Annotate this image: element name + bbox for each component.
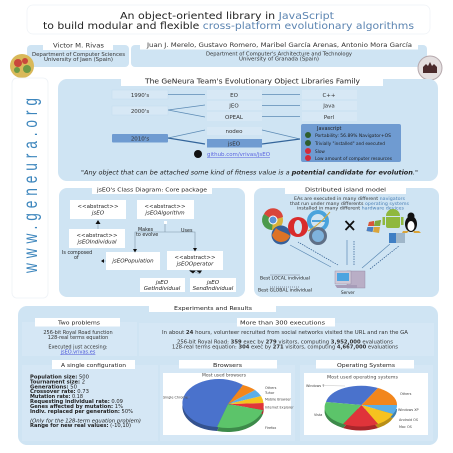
panel: Jaen affiliation: Department of Computer Sciences	[32, 52, 126, 58]
pie labels: operating systems	[306, 384, 419, 429]
heading: class diagram	[92, 184, 212, 194]
panel: Jaen affiliation	[27, 40, 129, 67]
pie chart: operating systems	[325, 386, 397, 430]
panel: Granada affiliation: Juan J. Merelo, Gustavo Romero, Maribel García Arenas, Antonio Mora García	[146, 42, 412, 49]
panel: island model	[254, 184, 439, 297]
libraries: EO	[230, 93, 239, 99]
description	[290, 196, 410, 212]
panel: two problems: 256-bit Royal Road function	[43, 330, 113, 336]
panel: single configuration: Tournament size: 2	[30, 380, 85, 386]
arrows: timeline	[168, 94, 300, 144]
panel: single configuration: Indiv. replaced per generation: 50%	[30, 409, 133, 415]
class boxes: jsEOOperator	[176, 262, 214, 268]
pie chart: browsers	[182, 379, 264, 432]
panel: www.geneura.org	[12, 78, 48, 298]
arrows: relations	[98, 223, 200, 274]
panel: single configuration: (Only for the 128-term equation problem)	[30, 418, 141, 424]
arrows: island exchange	[290, 240, 390, 268]
panel: single configuration: Crossover rate: 0.73	[30, 389, 89, 395]
heading: family: The GeNeura Team's Evolutionary Object Libraries Family	[144, 78, 360, 86]
icons: browsers	[262, 208, 330, 245]
libraries: JEO	[228, 104, 239, 110]
panel: Jaen affiliation: University of Jaen (Spain)	[44, 57, 113, 63]
panel: single configuration: A single configuration	[61, 363, 126, 369]
panel: Granada affiliation: University of Granada (Spain)	[239, 56, 319, 62]
legend: Best LOCAL individual	[260, 276, 310, 282]
diagram labels	[62, 227, 193, 261]
class boxes: SendIndividual	[193, 286, 234, 292]
icons: operating systems	[366, 209, 421, 243]
panel: single configuration: Mutation rate: 0.18	[30, 394, 83, 400]
libraries: C++	[322, 93, 336, 99]
legend	[258, 275, 312, 294]
pie labels: browsers: Tuhor	[264, 391, 275, 395]
diagram labels: of	[74, 255, 79, 261]
class boxes: jsEOAlgorithm	[144, 210, 185, 216]
pie labels: operating systems: Windows XP	[398, 408, 419, 412]
panel: www.geneura.org: www.geneura.org	[20, 93, 42, 274]
panel: single configuration: Requesting individual rate: 0.09	[30, 399, 123, 405]
decades: 2010's	[131, 136, 149, 142]
panel: Javascript features: Low amount of computer resources	[315, 156, 392, 161]
pie labels: operating systems: Others	[400, 392, 412, 396]
pie labels: operating systems: Android OS	[399, 418, 418, 422]
panel: Granada affiliation	[131, 40, 427, 67]
decades: 1990's	[131, 93, 149, 99]
pie labels: operating systems: Vista	[314, 413, 322, 417]
diagram labels: Is composed	[62, 250, 92, 256]
icon: University of Jaen logo	[10, 54, 34, 78]
icon: University of Granada logo	[418, 56, 442, 80]
icon: server	[335, 271, 365, 295]
panel: browsers	[160, 360, 295, 441]
panel: browsers: Browsers	[213, 363, 242, 369]
panel: single configuration: Population size: 500	[30, 374, 89, 380]
panel: browsers: Most used browsers	[202, 372, 247, 378]
heading: experiments	[149, 303, 276, 312]
panel: Granada affiliation: Department of Computer's Architecture and Technology	[206, 52, 352, 58]
class boxes: <<abstract>>	[174, 255, 216, 261]
libraries: Perl	[324, 115, 335, 121]
diagram labels: to evolve	[136, 232, 158, 238]
libraries: Java	[322, 104, 335, 110]
pie labels: browsers	[163, 386, 294, 430]
libraries: nodeo	[225, 129, 243, 135]
title	[27, 5, 430, 34]
panel: experiments and results	[18, 303, 438, 445]
class boxes: <<abstract>>	[76, 233, 118, 239]
class boxes: <<abstract>>	[144, 204, 186, 210]
decades	[112, 90, 168, 142]
panel: class diagram	[59, 184, 245, 297]
decades: 2000's	[131, 109, 149, 115]
diagram labels: Uses	[181, 228, 193, 234]
class boxes: jsEOPopulation	[111, 258, 154, 264]
title: to build modular and flexible cross-platform evolutionary algorithms	[43, 21, 414, 32]
heading: family	[121, 75, 383, 86]
panel: two problems: 128-real terms equation	[48, 335, 108, 341]
panel: operating systems: Most used operating systems	[327, 374, 398, 380]
panel: Javascript features: Javascript	[316, 126, 342, 132]
legend: Best GLOBAL individual	[258, 288, 312, 294]
panel: two problems: Executed just accesing:	[48, 344, 108, 350]
class boxes: GetIndividual	[144, 286, 181, 292]
quote: "Any object that can be attached some kind of fitness value is a potential candidate for evolution ."	[81, 168, 418, 176]
title: An object-oriented library in JavaScript	[120, 11, 334, 22]
pie labels: operating systems: Mac OS	[399, 425, 412, 429]
panel: Javascript features: Portability: 56.89% Navigator+OS	[315, 133, 391, 138]
pie labels: browsers: Single Chrome	[163, 396, 188, 400]
description: installed in many different hardware devices	[297, 206, 405, 212]
heading: island model	[285, 184, 406, 194]
panel: operating systems: Operating Systems	[337, 363, 395, 369]
heading: experiments: Experiments and Results	[174, 306, 252, 312]
panel: more than 300 executions	[139, 318, 434, 356]
class boxes: jsEO	[91, 210, 105, 216]
panel: single configuration: Genes affected by mutation: 1%	[30, 404, 123, 410]
pie labels: browsers: Mobile Browser	[265, 398, 292, 402]
panel: two problems: Two problems	[57, 321, 100, 327]
panel: Jaen affiliation: Victor M. Rivas	[53, 42, 104, 50]
panel: single configuration: Generations: 50	[30, 384, 77, 390]
panel: Javascript features: Slow	[315, 149, 325, 154]
class boxes: <<abstract>>	[77, 204, 119, 210]
pie labels: operating systems: Windows 7	[306, 384, 324, 388]
description: EAs are executed in many different navigators	[294, 196, 406, 202]
panel: more than 300 executions: More than 300 executions	[240, 321, 325, 327]
panel: libraries family	[58, 75, 438, 181]
panel: two problems: jsEO.vrivas.es	[60, 350, 96, 356]
panel: more than 300 executions: In about 24 hours, volunteer recruited from social networks visited the URL and ran the GA	[162, 330, 409, 336]
github link: github.com/vrivas/jsEO	[207, 152, 270, 158]
icon: server: Server	[341, 290, 355, 295]
panel: Javascript features: Trivially "installed" and executed	[314, 141, 385, 146]
pie labels: browsers: Others	[265, 386, 277, 390]
libraries: OPEAL	[225, 115, 244, 121]
panel: more than 300 executions: 256-bit Royal Road: 359 exec by 279 visitors, computing 3,952,000 evaluations	[177, 340, 393, 346]
pie labels: browsers: Internet Explorer	[265, 406, 294, 410]
panel: single configuration: Range for new real values: (-10,10)	[30, 423, 131, 429]
panel: more than 300 executions: 128-real terms equation: 304 exec by 271 visitors, computing 4,667,000 evaluations	[172, 344, 398, 350]
description: that run under many differents operating systems	[290, 201, 410, 207]
github link	[194, 150, 270, 158]
panel: Javascript features	[301, 124, 401, 162]
class boxes: jsEO	[206, 280, 220, 286]
panel: two problems	[22, 318, 137, 356]
pie labels: browsers: Firefox	[265, 426, 276, 430]
class boxes: jsEO	[155, 280, 169, 286]
panel: operating systems	[300, 360, 433, 441]
diagram labels: Makes	[138, 227, 154, 233]
panel: single configuration	[22, 360, 158, 441]
libraries: jsEO	[227, 142, 241, 148]
heading: class diagram: jsEO's Class Diagram: Core package	[96, 188, 208, 194]
class boxes: jsEOIndividual	[77, 240, 117, 246]
heading: island model: Distributed island model	[305, 188, 387, 194]
icon: cross	[346, 221, 354, 230]
class boxes	[69, 200, 236, 292]
libraries	[207, 90, 357, 148]
